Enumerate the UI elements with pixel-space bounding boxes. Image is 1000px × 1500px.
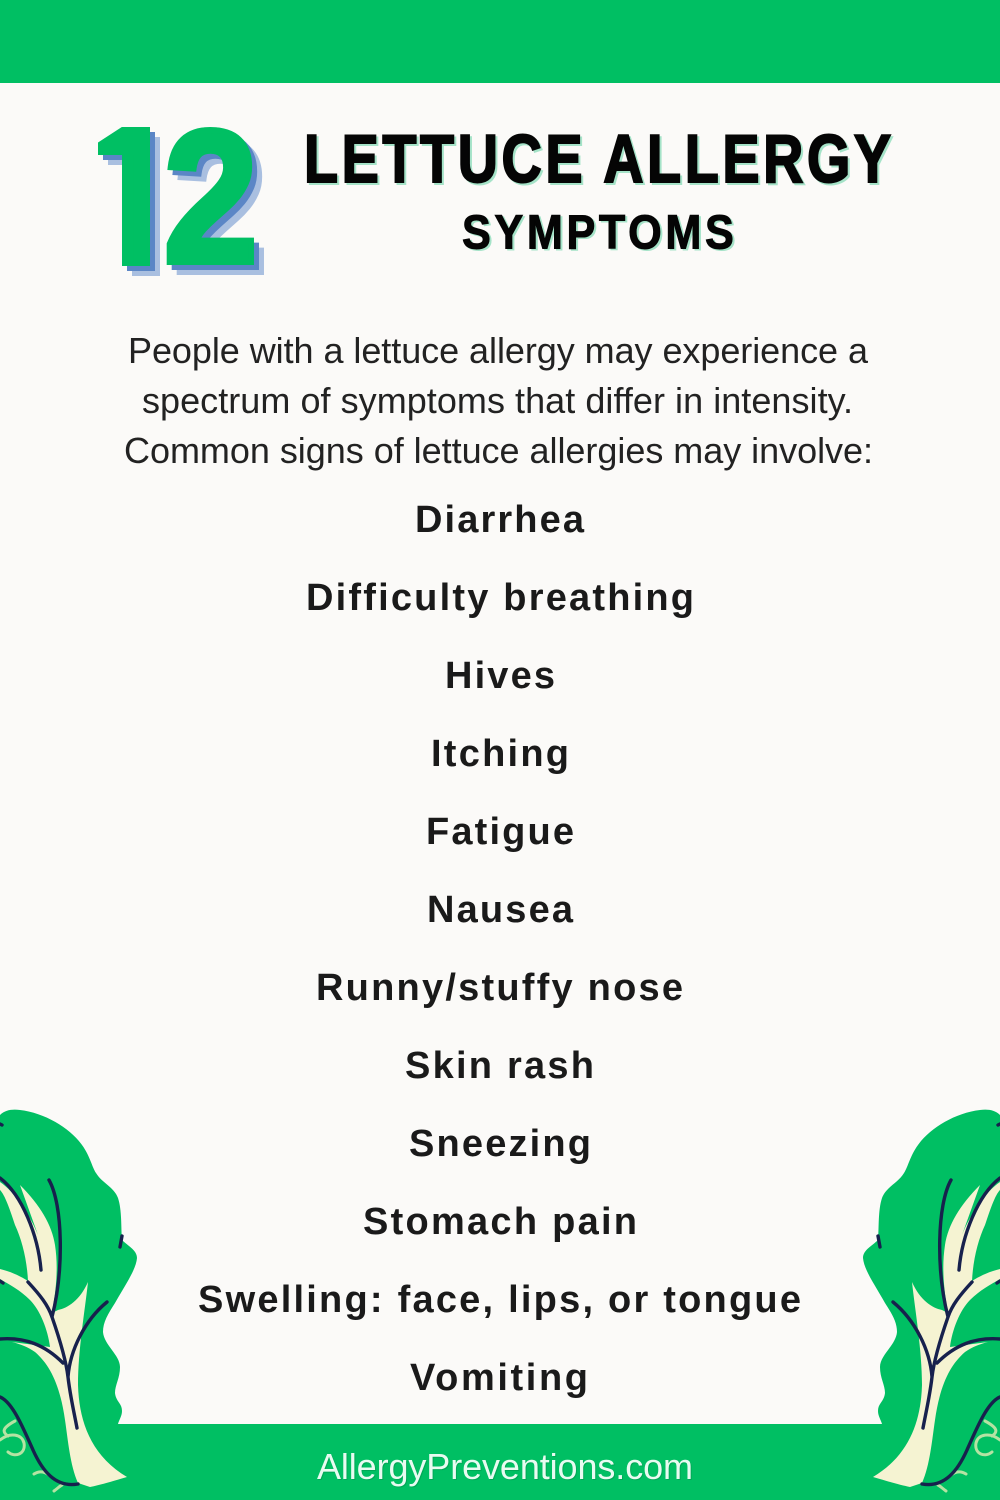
footer band <box>0 1424 1000 1500</box>
subtitle: symptoms: SYMPTOMS <box>464 207 736 261</box>
intro paragraph: People with a lettuce allergy may experience a <box>128 330 869 371</box>
big number 12: 2 <box>164 92 258 303</box>
symptom list: Diarrhea <box>415 499 585 541</box>
big number 12: 1 <box>80 118 185 329</box>
big number 12: 1 <box>75 113 180 324</box>
symptom list: Hives <box>445 655 555 697</box>
big number 12: 2 <box>168 97 263 308</box>
big number 12: 1 <box>70 108 175 319</box>
icon: right lettuce leaf <box>863 1110 1000 1500</box>
symptom list: Vomiting <box>410 1357 588 1399</box>
top band <box>0 0 1000 83</box>
big number 12 <box>98 127 264 276</box>
symptom list: Swelling: face, lips, or tongue <box>198 1279 801 1321</box>
symptom list: Difficulty breathing <box>306 577 694 619</box>
symptom list <box>198 499 801 1399</box>
symptom list: Runny/stuffy nose <box>316 967 683 1009</box>
big number 12: 2 <box>174 102 268 313</box>
symptom list: Stomach pain <box>363 1201 637 1243</box>
title: lettuce allergy: LETTUCE ALLERGY <box>304 122 891 197</box>
intro paragraph <box>124 330 873 471</box>
footer website text: AllergyPreventions.com <box>318 1447 694 1488</box>
big number 12: 1 <box>85 98 190 309</box>
symptom list: Nausea <box>427 889 574 931</box>
big number 12: 1 <box>90 118 195 329</box>
symptom list: Sneezing <box>409 1123 591 1165</box>
big number 12: 1 <box>85 113 190 324</box>
intro paragraph: Common signs of lettuce allergies may involve: <box>124 430 873 471</box>
symptom list: Fatigue <box>426 811 574 853</box>
subtitle: symptoms: SYMPTOMS <box>462 205 734 259</box>
symptom list: Skin rash <box>405 1045 594 1087</box>
title: lettuce allergy: LETTUCE ALLERGY <box>306 124 893 199</box>
big number 12: 1 <box>90 103 195 314</box>
symptom list: Itching <box>431 733 569 775</box>
icon: left lettuce leaf <box>0 1110 137 1500</box>
big number 12: 1 <box>80 108 185 319</box>
intro paragraph: spectrum of symptoms that differ in intensity. <box>142 380 853 421</box>
big number 12: 1 <box>80 93 185 304</box>
footer website text: AllergyPreventions.com <box>317 1446 693 1487</box>
